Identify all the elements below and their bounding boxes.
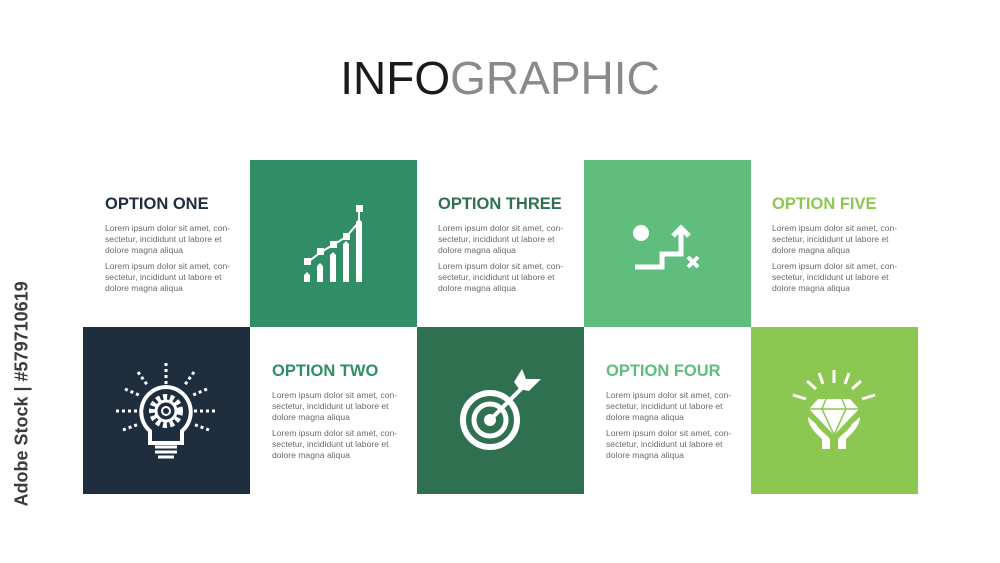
panel: option four text: sectetur, incididunt ut labore et (606, 401, 723, 411)
panel: option five text (772, 195, 897, 293)
panel: option two text: Lorem ipsum dolor sit amet, con- (272, 428, 397, 438)
panel: option one text (105, 195, 230, 293)
panel: option three text: sectetur, incididunt ut labore et (438, 234, 555, 244)
panel: option two text (272, 362, 397, 460)
panel: option two text: sectetur, incididunt ut labore et (272, 401, 389, 411)
panel: option three text (438, 195, 563, 293)
panel: option three text: sectetur, incididunt ut labore et (438, 272, 555, 282)
panel: option five text: sectetur, incididunt ut labore et (772, 234, 889, 244)
panel: option three text: Lorem ipsum dolor sit amet, con- (438, 223, 563, 233)
panel: option two text: dolore magna aliqua (272, 412, 350, 422)
panel: option two text: dolore magna aliqua (272, 450, 350, 460)
panel: option two text: OPTION TWO (272, 362, 378, 380)
panel: diamond square (751, 327, 918, 494)
panel: option four text: Lorem ipsum dolor sit amet, con- (606, 390, 731, 400)
panel: option five text: sectetur, incididunt ut labore et (772, 272, 889, 282)
panel: option one text: dolore magna aliqua (105, 283, 183, 293)
panel: target square (417, 327, 584, 494)
panel: strategy icon square (584, 160, 751, 327)
panel: option one text: sectetur, incididunt ut labore et (105, 272, 222, 282)
panel: option four text: dolore magna aliqua (606, 450, 684, 460)
panel: option four text: dolore magna aliqua (606, 412, 684, 422)
panel: option one text: OPTION ONE (105, 195, 209, 213)
panel: option one text: sectetur, incididunt ut labore et (105, 234, 222, 244)
panel: option three text: dolore magna aliqua (438, 245, 516, 255)
panel: option four text (606, 362, 731, 460)
panel: option five text: dolore magna aliqua (772, 245, 850, 255)
panel: idea bulb square (83, 327, 250, 494)
panel: chart icon square (250, 160, 417, 327)
panel: option three text: Lorem ipsum dolor sit amet, con- (438, 261, 563, 271)
title: INFOGRAPHIC (340, 52, 660, 104)
panel: option four text: sectetur, incididunt ut labore et (606, 439, 723, 449)
panel: option five text: OPTION FIVE (772, 195, 877, 213)
panel: option one text: Lorem ipsum dolor sit amet, con- (105, 223, 230, 233)
panel: option one text: dolore magna aliqua (105, 245, 183, 255)
panel: option one text: Lorem ipsum dolor sit amet, con- (105, 261, 230, 271)
panel: option four text: OPTION FOUR (606, 362, 721, 380)
panel: option three text: OPTION THREE (438, 195, 562, 213)
panel: option two text: Lorem ipsum dolor sit amet, con- (272, 390, 397, 400)
panel: option three text: dolore magna aliqua (438, 283, 516, 293)
panel: option five text: Lorem ipsum dolor sit amet, con- (772, 223, 897, 233)
panel: option five text: Lorem ipsum dolor sit amet, con- (772, 261, 897, 271)
panel: option five text: dolore magna aliqua (772, 283, 850, 293)
panel: option four text: Lorem ipsum dolor sit amet, con- (606, 428, 731, 438)
panel: option two text: sectetur, incididunt ut labore et (272, 439, 389, 449)
watermark text: Adobe Stock | #579710619 (12, 281, 32, 506)
